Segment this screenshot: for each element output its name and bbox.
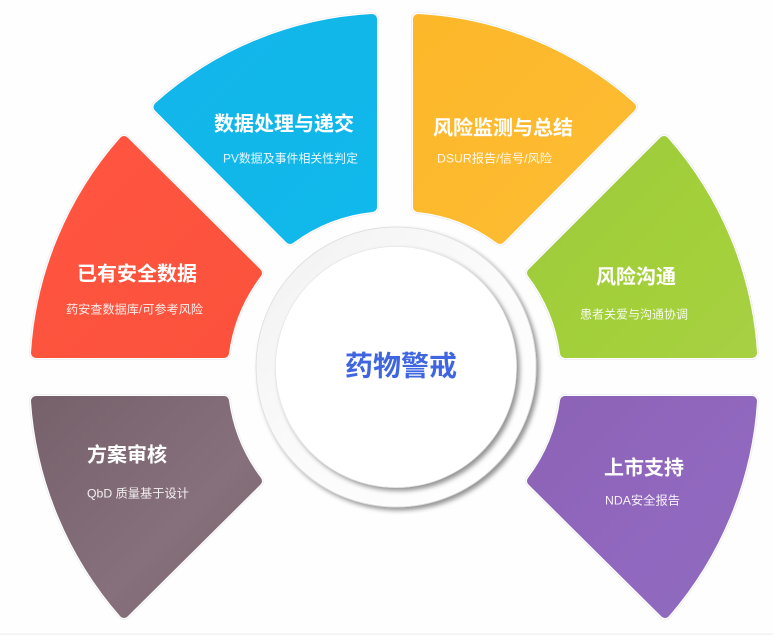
panel: risk communication (green): 患者关爱与沟通协调	[580, 306, 688, 322]
center hub: concentric rings with title: 药物警戒	[345, 350, 457, 382]
panel: existing safety data (red): 药安查数据库/可参考风险	[66, 302, 203, 316]
panel: protocol review (brown)	[36, 401, 257, 613]
panel: existing safety data (red)	[36, 141, 257, 353]
panel: data processing and submission (blue): 数据处理与递交	[214, 112, 354, 136]
panel: risk monitoring and summary (orange): DSUR报告/信号/风险	[437, 150, 552, 166]
panel: existing safety data (red): 已有安全数据	[77, 262, 197, 286]
panel: data processing and submission (blue): PV数据及事件相关性判定	[223, 150, 358, 166]
panel: risk communication (green)	[532, 141, 752, 353]
panel: marketing support (purple): NDA安全报告	[605, 492, 680, 508]
panel: marketing support (purple): 上市支持	[604, 456, 684, 480]
panel: risk communication (green): 风险沟通	[596, 264, 676, 288]
center hub: concentric rings with title	[256, 227, 536, 507]
panel: marketing support (purple)	[532, 401, 752, 613]
panel: risk monitoring and summary (orange)	[418, 19, 631, 239]
panel: risk monitoring and summary (orange): 风险监测与总结	[433, 116, 573, 140]
panel: protocol review (brown): QbD 质量基于设计	[87, 486, 189, 500]
panel: protocol review (brown): 方案审核	[87, 442, 167, 466]
panel: data processing and submission (blue)	[158, 19, 372, 239]
